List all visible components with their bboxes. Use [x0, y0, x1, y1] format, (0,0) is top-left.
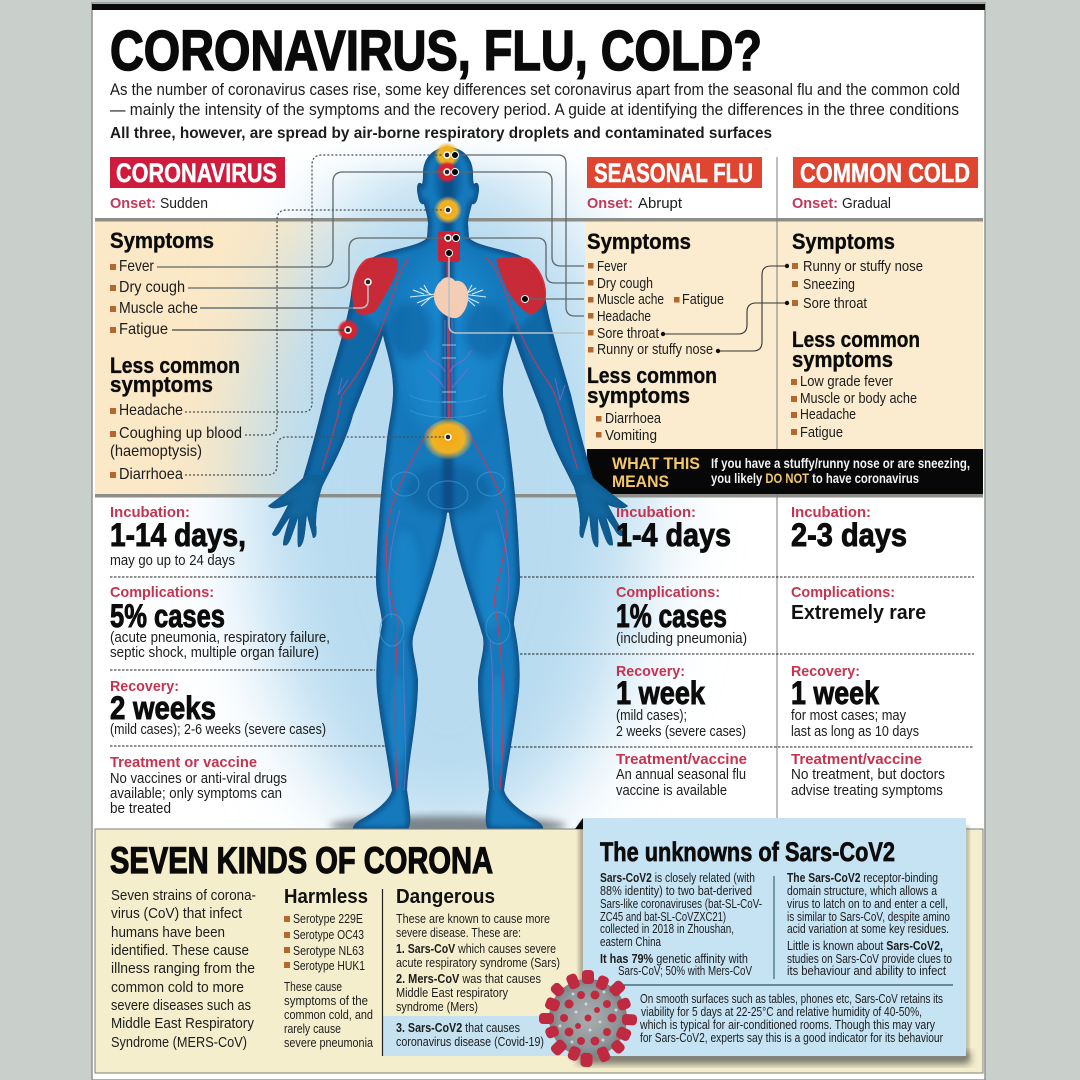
column: harmless: These cause	[284, 979, 342, 994]
panel: cold facts: Extremely rare	[791, 602, 926, 624]
text: right column: virus to latch on to and enter a cell,	[787, 897, 948, 911]
column header: common cold	[792, 157, 978, 212]
text: bottom paragraph	[639, 991, 944, 1045]
panel: cold facts: 1 week	[791, 675, 879, 711]
intro text: — mainly the intensity of the symptoms and the recovery period. A guide at identifying the differences in the three conditions	[110, 100, 959, 119]
intro text: All three, however, are spread by air-borne respiratory droplets and contaminated surfaces	[110, 125, 772, 142]
text: left column: Sars-CoV2 is closely related (with	[600, 871, 755, 885]
column: harmless: symptoms of the	[284, 993, 368, 1008]
text: right column: its behaviour and ability to infect	[787, 964, 946, 978]
text: right column: The Sars-CoV2 receptor-binding	[787, 871, 938, 885]
text: bottom paragraph: viability for 5 days at 22-25°C and relative humidity of 40-50%,	[641, 1004, 922, 1019]
panel: coronavirus facts: Treatment or vaccine	[110, 754, 257, 771]
panel: coronavirus facts: Complications:	[110, 584, 214, 601]
panel: flu symptoms: Dry cough	[597, 276, 653, 292]
column: dangerous: Middle East respiratory	[396, 985, 508, 1000]
column header: coronavirus: Sudden	[160, 195, 208, 212]
column: dangerous: 1. Sars-CoV which causes severe	[396, 941, 556, 956]
column: harmless: Harmless	[284, 886, 368, 908]
column header: seasonal flu: SEASONAL FLU	[594, 158, 753, 188]
corner triangle	[575, 818, 583, 829]
body silhouette	[268, 147, 628, 831]
panel: coronavirus symptoms: Fever	[119, 258, 155, 275]
text: intro paragraph: humans have been	[111, 924, 225, 941]
background glow behind body	[95, 155, 648, 845]
panel: coronavirus facts: may go up to 24 days	[110, 553, 235, 569]
callout: what this means: you likely DO NOT to have coronavirus	[711, 471, 919, 486]
text: right column: studies on Sars-CoV provide clues to	[787, 952, 952, 966]
panel: coronavirus facts	[110, 504, 330, 817]
panel: coronavirus symptoms: Less common	[110, 353, 240, 378]
text: intro paragraph: Middle East Respiratory	[111, 1015, 254, 1032]
panel: cold symptoms: Muscle or body ache	[800, 391, 917, 407]
column: harmless: Serotype NL63	[293, 943, 364, 958]
white mask above header	[94, 10, 982, 180]
panel: cold facts: Treatment/vaccine	[791, 751, 922, 768]
panel: flu facts: (including pneumonia)	[616, 631, 747, 647]
body shading	[262, 147, 634, 831]
column: dangerous: acute respiratory syndrome (Sars)	[396, 955, 560, 970]
column header: seasonal flu: Abrupt	[638, 195, 683, 212]
text: right column: Little is known about Sars-CoV2,	[787, 939, 943, 953]
panel: coronavirus facts: 5% cases	[110, 598, 225, 634]
panel: coronavirus facts: be treated	[110, 801, 171, 817]
text: intro paragraph: identified. These cause	[111, 942, 249, 959]
column header: seasonal flu	[587, 157, 762, 212]
panel: coronavirus symptoms	[110, 228, 242, 483]
panel: flu symptoms: Fever	[597, 259, 627, 275]
yellow zone: head	[434, 142, 460, 168]
column: dangerous: These are known to cause more	[396, 911, 550, 926]
column header: common cold: COMMON COLD	[800, 158, 970, 188]
panel: cold symptoms	[791, 229, 923, 441]
column: harmless: Serotype HUK1	[293, 958, 365, 973]
yellow zone: neck	[434, 196, 462, 224]
red zone: forehead	[436, 161, 458, 183]
panel: coronavirus symptoms: Muscle ache	[119, 300, 198, 317]
panel: cold facts: No treatment, but doctors	[791, 767, 945, 783]
veins and arteries	[322, 258, 578, 790]
column header: common cold: Onset:	[792, 195, 838, 212]
panel: coronavirus facts: (mild cases); 2-6 weeks (severe cases)	[110, 722, 326, 738]
text: right column: is similar to Sars-CoV, despite amino	[787, 910, 950, 924]
column header: common cold: Gradual	[842, 195, 891, 212]
text: left column: collected in 2018 in Zhoushan,	[600, 922, 734, 936]
text: intro paragraph: Syndrome (MERS-CoV)	[111, 1034, 247, 1051]
panel: flu symptoms	[587, 229, 724, 444]
panel: cold symptoms: Sore throat	[803, 296, 867, 312]
panel: cold facts: Complications:	[791, 584, 895, 601]
panel: coronavirus symptoms: Headache	[119, 402, 183, 419]
column: dangerous: coronavirus disease (Covid-19)	[396, 1034, 544, 1049]
panel: seven kinds of corona	[95, 829, 983, 1073]
text: right column	[787, 871, 952, 978]
column: dangerous: syndrome (Mers)	[396, 999, 478, 1014]
panel: cold facts: last as long as 10 days	[791, 724, 919, 740]
column: dangerous: Dangerous	[396, 886, 495, 908]
callout: what this means: WHAT THIS	[612, 454, 700, 473]
column: dangerous: severe disease. These are:	[396, 925, 521, 940]
text: left column: ZC45 and bat-SL-CoVZXC21)	[600, 910, 726, 924]
panel: flu facts: vaccine is available	[616, 783, 727, 799]
column header: coronavirus: CORONAVIRUS	[116, 158, 277, 188]
text: right column: domain structure, which allows a	[787, 884, 937, 898]
panel: cold symptoms: Symptoms	[792, 229, 895, 254]
column: harmless: Serotype 229E	[293, 911, 363, 926]
panel: coronavirus symptoms: (haemoptysis)	[110, 443, 202, 460]
panel: coronavirus symptoms: Coughing up blood	[119, 425, 242, 442]
yellow zone: stomach	[423, 417, 473, 460]
panel: flu symptoms: Runny or stuffy nose	[597, 342, 713, 358]
panel: cold symptoms: Headache	[800, 407, 856, 423]
panel: coronavirus symptoms: Fatigue	[119, 321, 168, 338]
red zone: left shoulder	[352, 257, 398, 315]
panel: cold facts: for most cases; may	[791, 708, 907, 724]
panel: coronavirus symptoms: Diarrhoea	[119, 466, 183, 483]
text: left column: It has 79% genetic affinity with	[600, 952, 748, 966]
marker dots	[345, 152, 528, 440]
intro text	[110, 80, 960, 142]
panel: flu symptoms: Sore throat	[597, 326, 659, 342]
heading: seven kinds: SEVEN KINDS OF CORONA	[110, 840, 493, 881]
column header: seasonal flu: Onset:	[587, 195, 633, 212]
panel: flu facts: 1-4 days	[616, 517, 731, 553]
top black bar	[92, 4, 985, 10]
panel: flu facts: 1 week	[616, 675, 705, 711]
highlight: Sars-CoV2 row	[383, 1016, 583, 1056]
text: right column: acid variation at some key residues.	[787, 922, 949, 936]
text: left column: eastern China	[600, 935, 661, 949]
text: left column: 88% identity) to two bat-derived	[600, 884, 752, 898]
column: dangerous	[396, 886, 560, 1049]
heart	[434, 277, 468, 318]
column: harmless: common cold, and	[284, 1007, 373, 1022]
text: intro paragraph: Seven strains of corona-	[111, 887, 256, 904]
panel: cold facts: advise treating symptoms	[791, 783, 943, 799]
panel: coronavirus facts: 2 weeks	[110, 690, 216, 726]
panel: coronavirus facts: septic shock, multiple organ failure)	[110, 645, 319, 661]
panel: flu symptoms: Symptoms	[587, 229, 691, 254]
panel: cold symptoms: Sneezing	[803, 277, 855, 293]
panel: coronavirus symptoms: Symptoms	[110, 228, 214, 253]
text: intro paragraph	[111, 887, 256, 1051]
panel: flu facts: (mild cases);	[616, 708, 687, 724]
panel: coronavirus symptoms: Dry cough	[119, 279, 185, 296]
panel: flu symptoms: symptoms	[587, 383, 690, 408]
text: bottom paragraph: which is typical for air-conditioned rooms. Though this may vary	[639, 1017, 935, 1032]
text: bottom paragraph: for Sars-CoV2, experts say this is a good indicator for its behaviour	[640, 1030, 944, 1045]
panel: flu facts: An annual seasonal flu	[616, 767, 746, 783]
callout: what this means	[587, 449, 983, 494]
panel: flu symptoms: Diarrhoea	[605, 411, 662, 427]
beige panel: right columns	[585, 221, 983, 449]
heading: unknowns: The unknowns of Sars-CoV2	[600, 837, 895, 867]
panel: cold symptoms: Low grade fever	[800, 374, 893, 390]
panel: cold facts: Recovery:	[791, 663, 860, 680]
section rules	[95, 157, 983, 818]
panel: flu symptoms: Muscle ache	[597, 292, 664, 308]
panel: flu symptoms: Less common	[587, 363, 717, 388]
lungs	[410, 285, 486, 306]
panel: the unknowns of Sars-CoV2	[575, 818, 970, 1064]
panel: flu facts: Complications:	[616, 584, 720, 601]
column: dangerous: 3. Sars-CoV2 that causes	[396, 1020, 520, 1035]
panel: coronavirus facts: 1-14 days,	[110, 517, 246, 553]
callout: what this means: If you have a stuffy/runny nose or are sneezing,	[711, 456, 970, 471]
human body illustration	[262, 142, 634, 831]
panel: flu facts: Incubation:	[616, 504, 696, 521]
text: bottom paragraph: On smooth surfaces such as tables, phones etc, Sars-CoV retains its	[640, 991, 943, 1006]
text: left column: Sars-like coronaviruses (bat-SL-CoV-	[600, 897, 762, 911]
text: intro paragraph: severe diseases such as	[111, 997, 251, 1014]
text: intro paragraph: illness ranging from the	[111, 960, 255, 977]
panel: flu facts: Treatment/vaccine	[616, 751, 747, 768]
panel: coronavirus facts: available; only symptoms can	[110, 786, 282, 802]
panel: flu symptoms: Headache	[597, 309, 651, 325]
column: harmless: severe pneumonia	[284, 1035, 374, 1050]
panel: cold symptoms: Runny or stuffy nose	[803, 259, 923, 275]
foot shadow	[330, 816, 566, 836]
text: left column: Sars-CoV; 50% with Mers-CoV	[618, 964, 753, 978]
text: intro paragraph: common cold to more	[111, 979, 244, 996]
column header: coronavirus	[110, 157, 285, 212]
panel: coronavirus facts: Recovery:	[110, 678, 179, 695]
panel: cold symptoms: Fatigue	[800, 425, 843, 441]
red zone: throat	[438, 231, 460, 262]
text: left column	[600, 871, 762, 978]
panel: flu symptoms: Fatigue	[682, 292, 724, 308]
column header: coronavirus: Onset:	[110, 195, 156, 212]
panel: cold facts	[791, 504, 945, 799]
panel: cold symptoms: Less common	[792, 327, 920, 352]
panel: coronavirus facts: Incubation:	[110, 504, 190, 521]
red zone: right shoulder	[496, 257, 546, 315]
column: harmless: Serotype OC43	[293, 927, 364, 942]
red zone: arm	[337, 319, 359, 341]
callout: what this means: MEANS	[612, 472, 669, 491]
panel: cold facts: Incubation:	[791, 504, 871, 521]
column: harmless: rarely cause	[284, 1021, 341, 1036]
panel: cold facts: 2-3 days	[791, 517, 907, 553]
panel: flu facts: Recovery:	[616, 663, 685, 680]
title: CORONAVIRUS, FLU, COLD?	[110, 19, 762, 83]
text: intro paragraph: virus (CoV) that infect	[111, 905, 243, 922]
panel: flu facts: 1% cases	[616, 598, 727, 634]
column: harmless	[284, 886, 374, 1050]
panel: coronavirus facts: (acute pneumonia, respiratory failure,	[110, 630, 330, 646]
icon: coronavirus particle	[539, 970, 637, 1067]
panel: flu symptoms: Vomiting	[605, 428, 657, 444]
panel: cold symptoms: symptoms	[792, 347, 893, 372]
panel: coronavirus facts: No vaccines or anti-viral drugs	[110, 771, 287, 787]
panel: flu facts: 2 weeks (severe cases)	[616, 724, 746, 740]
intro text: As the number of coronavirus cases rise, some key differences set coronavirus apart from the seasonal flu and the common cold	[110, 80, 960, 99]
connector lines	[157, 155, 789, 475]
panel: coronavirus symptoms: symptoms	[110, 372, 213, 397]
column: dangerous: 2. Mers-CoV was that causes	[396, 971, 541, 986]
panel: flu facts	[616, 504, 747, 799]
